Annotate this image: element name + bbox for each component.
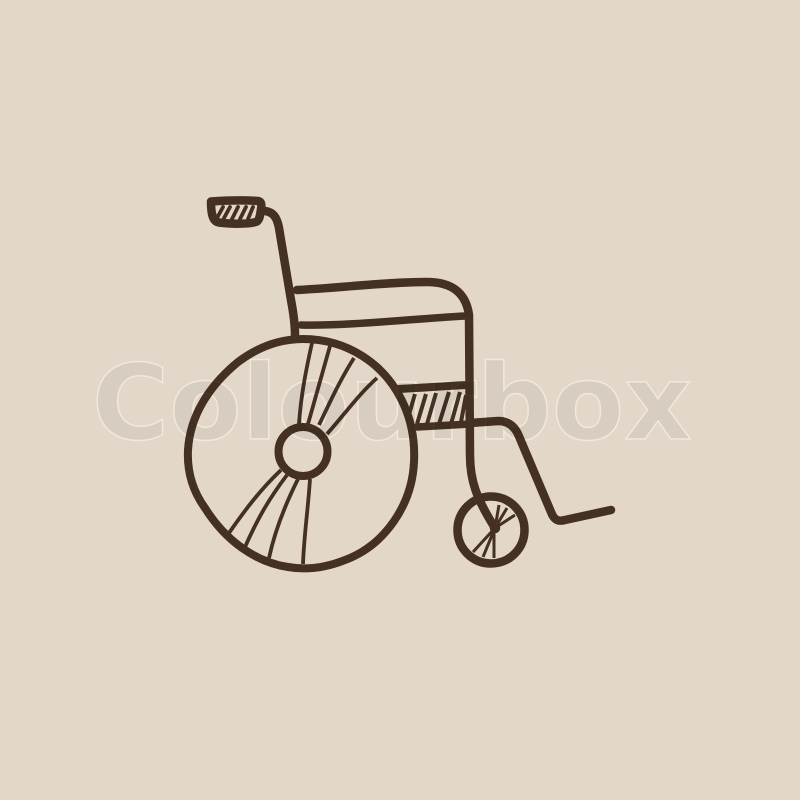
small hub bbox=[492, 525, 498, 531]
watermark: Colourbox: Colourbox bbox=[92, 342, 692, 464]
handle grip bbox=[211, 200, 261, 224]
icon: wheelchair bbox=[188, 200, 611, 568]
small wheel bbox=[458, 496, 524, 564]
large wheel bbox=[188, 339, 414, 568]
lower armrest bbox=[301, 316, 465, 325]
spokes bbox=[229, 343, 377, 564]
hub bbox=[278, 427, 328, 476]
backrest post bbox=[265, 211, 295, 335]
upper armrest and front frame bbox=[297, 282, 495, 528]
footrest bar bbox=[470, 421, 611, 521]
seat bbox=[397, 385, 470, 427]
